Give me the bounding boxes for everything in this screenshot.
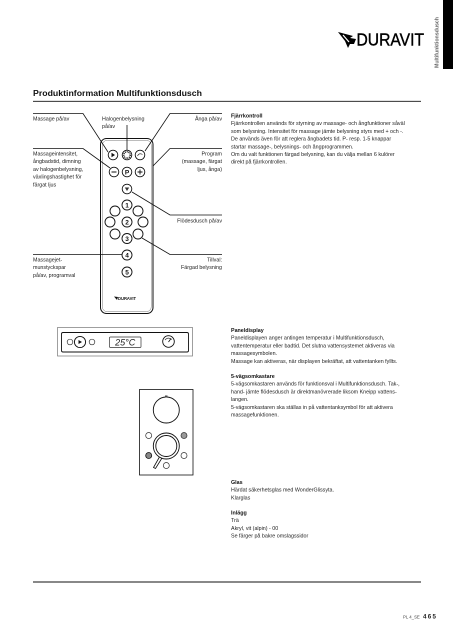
- text block: glass: [231, 480, 334, 501]
- text block: remote control: direkt på fjärrkontrollen.: [231, 159, 287, 166]
- page number: [403, 614, 437, 620]
- text block: panel display: Paneldisplay: [231, 328, 264, 334]
- remote body: [100, 138, 153, 314]
- text block: remote control: som belysning. Intensitet för massage jämte belysning styrs med + och -.: [231, 129, 403, 135]
- text block: remote control: Fjärrkontrollen används för styrning av massage- och ångfunktioner såväl: [231, 120, 405, 127]
- label: optional coloured light: Tillval:: [207, 258, 222, 264]
- label: hand shower: Flödesdusch på/av: [177, 218, 222, 224]
- text block: insert: Trä: [231, 518, 239, 524]
- numbered and colour buttons: [105, 200, 148, 277]
- label: halogen: Halogenbelysning: [102, 116, 144, 122]
- label: massage on/off: Massage på/av: [33, 116, 70, 122]
- button: P: P: [125, 169, 130, 176]
- button: halogen: [122, 150, 132, 160]
- numbered and colour buttons: 5: [125, 269, 129, 276]
- title: Produktinformation Multifunktionsdusch: [33, 88, 202, 98]
- text block: panel display: [231, 328, 397, 365]
- button: minus: [109, 167, 119, 177]
- page number: 465: [423, 614, 437, 620]
- text block: remote control: De används även för att reglera ångbadets tid. P- resp. 1-5 knappar: [231, 136, 391, 143]
- panel dial: [163, 336, 174, 347]
- panel temperature display: 25°C: [114, 338, 136, 348]
- upper knob: [153, 396, 179, 423]
- text block: 5-way diverter: 5-vägsomkastaren ska ställas in på vattentanksymbol för att aktivera: [231, 404, 393, 411]
- text block: insert: Akryl, vit (alpin) - 00: [231, 526, 278, 532]
- numbered and colour buttons: 4: [125, 252, 129, 259]
- text block: 5-way diverter: langen.: [231, 397, 249, 403]
- remote control diagram: [100, 138, 153, 314]
- text block: panel display: Paneldisplayen anger antingen temperatur i Multifunktionsdusch,: [231, 336, 384, 342]
- label: massage intensity: färgat ljus: [33, 182, 56, 188]
- text block: insert: Inlägg: [231, 510, 247, 516]
- text block: glass: Härdat säkerhetsglas med WonderGlissyta.: [231, 488, 334, 494]
- button: shower: [122, 184, 132, 194]
- side tab: black marker: [443, 0, 453, 69]
- remote logo: DURAVIT: [118, 296, 136, 301]
- diverter diagram: [140, 390, 193, 475]
- text block: 5-way diverter: 5-vägsomkastare: [231, 374, 275, 380]
- text block: remote control: startar massage-, belysnings- och ångprogrammen.: [231, 143, 353, 150]
- text block: 5-way diverter: massagefunktionen.: [231, 412, 279, 418]
- label: program: ljus, ånga): [197, 166, 222, 173]
- numbered and colour buttons: 1: [125, 202, 129, 209]
- text block: 5-way diverter: 5-vägsomkastaren används för funktionsval i Multifunktionsdusch. Tak-,: [231, 382, 400, 388]
- label: massage intensity: Massageintensitet,: [33, 152, 78, 158]
- logo: Duravit: DURAVIT: [356, 30, 424, 50]
- leader lines: [33, 114, 222, 254]
- label: massage jets: Massagejet-: [33, 258, 62, 264]
- text block: glass: Klarglas: [231, 495, 251, 501]
- text block: panel display: Massage kan aktiveras, när displayen bekräftat, att vattentanken fyllts.: [231, 359, 397, 365]
- button: plus: [135, 167, 145, 177]
- text block: remote control: Fjärrkontroll: [231, 114, 263, 120]
- button: massage: [108, 150, 118, 160]
- text block: insert: [231, 510, 308, 540]
- text block: glass: Glas: [231, 480, 243, 486]
- numbered and colour buttons: 3: [125, 236, 129, 243]
- numbered and colour buttons: 2: [125, 219, 129, 226]
- label: program: Program: [202, 152, 222, 158]
- text block: panel display: vattentemperatur eller badtid. Det slutna vattensystemet aktiveras via: [231, 343, 395, 349]
- side tab: section label: Multifunktionsdusch: [434, 17, 440, 68]
- text block: insert: Se färger på bakre omslagssidor: [231, 533, 308, 540]
- function symbols: [146, 432, 187, 468]
- text block: 5-way diverter: hand- jämte flödesdusch är direktmanövrerade liksom Kneipp vattens-: [231, 389, 397, 395]
- label: massage intensity: av halogenbelysning,: [33, 167, 83, 173]
- page number: PL 4_SE: [403, 614, 420, 620]
- label: massage jets: på/av, programval: [33, 272, 75, 279]
- label: halogen: på/av: [102, 123, 115, 130]
- label: massage jets: munstyckspar: [33, 265, 66, 271]
- label: massage intensity: växlingshastighet för: [33, 175, 82, 181]
- panel buttons: [67, 336, 95, 348]
- panel display diagram: [58, 328, 192, 356]
- text block: remote control: [231, 114, 405, 166]
- button: steam: [135, 150, 145, 160]
- diverter knob and handle: [153, 433, 179, 468]
- text block: remote control: Om du valt funktionen färgad belysning, kan du välja mellan 6 kulörer: [231, 152, 395, 158]
- label: program: (massage, färgat: [182, 159, 223, 165]
- label: massage intensity: ångbadstid, dimning: [33, 158, 81, 165]
- label: optional coloured light: Färgad belysning: [181, 265, 222, 271]
- text block: panel display: massagesymbolen.: [231, 351, 277, 357]
- text block: 5-way diverter: [231, 374, 400, 418]
- button: P: [122, 167, 132, 177]
- label: steam: Ånga på/av: [195, 116, 222, 122]
